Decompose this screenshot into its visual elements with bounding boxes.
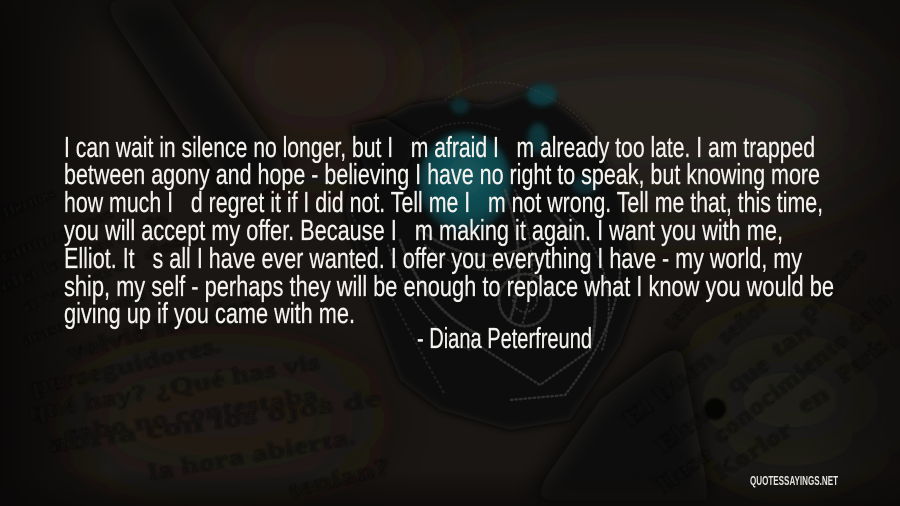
book text: left page: perseguidores.: [29, 332, 224, 400]
book text: right page: tener: [657, 274, 716, 335]
ring: dark silver setting: [345, 88, 640, 430]
ring: turquoise stones: [419, 84, 598, 232]
author: - Diana Peterfreund: [417, 323, 592, 355]
book text: left page: a vuestros dos ya: [20, 218, 220, 316]
book text: left page: qué hay? ¿Qué has vis: [27, 349, 321, 425]
book text: right page: conocimiento: [708, 327, 853, 448]
book text: right page: que: [722, 351, 774, 398]
book text: left page: Hermes: [0, 185, 57, 222]
book text: right page: tan: [766, 317, 817, 362]
book text: left page: acaso si tenemos la: [20, 279, 166, 349]
book text: right page: pronto: [793, 242, 872, 325]
book text: right page: Korlor: [709, 416, 797, 485]
book text: left page: volvió los ojos: [65, 291, 255, 365]
book text: right page: Ilese: [651, 441, 716, 498]
book text: left page: cabo no contestaba.: [62, 381, 328, 447]
book text: right page: El buen: [618, 344, 720, 432]
book text: left page: ella la puerta da: [0, 210, 170, 296]
book text: left page: campos pues: [0, 205, 116, 266]
book text: right page: señor: [712, 291, 774, 349]
book text: right page: [618, 242, 896, 498]
book text: left page: abría con los ojos de: [47, 386, 382, 457]
watermark: QUOTESSAYINGS.NET: [750, 473, 838, 488]
quote text: [64, 132, 834, 330]
book text: left page: tenían?: [285, 453, 393, 503]
book text: right page: París: [831, 333, 892, 388]
book text: right page: en: [793, 381, 833, 418]
book text: left page: [0, 185, 393, 503]
book text: left page: la hora abierta.: [147, 424, 358, 485]
quote text: giving up if you came with me.: [64, 298, 355, 330]
book text: right page: Elen: [651, 403, 713, 458]
book text: right page: de la: [842, 286, 896, 339]
hole in the page: [704, 398, 726, 420]
ring: silver beaded patterns: [350, 82, 620, 400]
